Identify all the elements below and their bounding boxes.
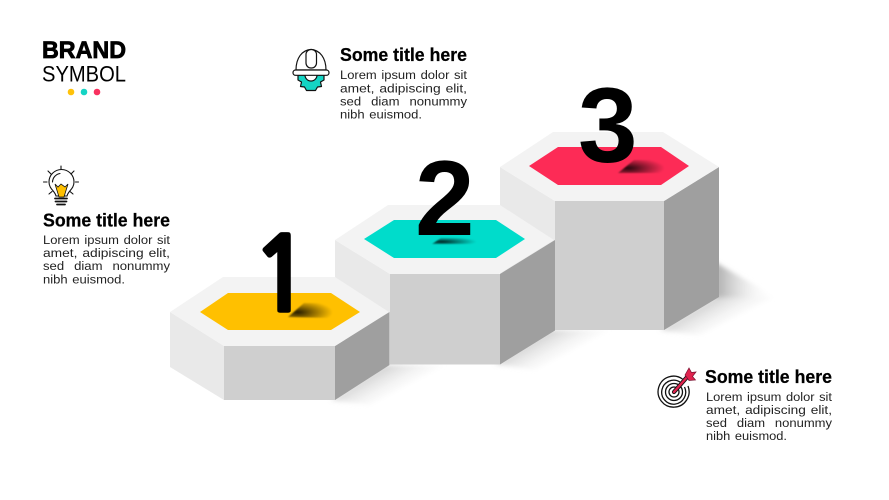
number 1: 1 [250,225,313,327]
body text: amet, adipiscing elit, [340,82,467,96]
body text: nibh euismod. [706,429,787,443]
number 3: 3 [578,65,638,185]
body text: Lorem ipsum dolor sit [340,68,468,82]
brand logo: SYMBOL [42,62,126,86]
block: lightbulb idea [43,166,171,286]
hexagon step 3 [500,132,719,330]
body text: amet, adipiscing elit, [43,246,170,260]
title: Some title here [705,367,832,387]
body text: Lorem ipsum dolor sit [43,233,171,247]
number 2: 2 [415,138,475,258]
block: helmet and gear [293,45,468,122]
body text: nibh euismod. [340,108,422,122]
icon: lightbulb [44,166,78,204]
body text: sed diam nonummy [706,416,833,430]
brand logo: BRAND [42,37,126,64]
brand logo [42,37,126,95]
hexagon step 2 [335,205,555,364]
ground shadows [331,262,775,405]
title: Some title here [340,45,467,65]
body text: sed diam nonummy [340,94,468,108]
body text [340,68,468,122]
body text: Lorem ipsum dolor sit [706,390,833,404]
body text [43,233,171,286]
icon: helmet with gear [293,50,329,90]
body text: sed diam nonummy [43,259,171,273]
block: target [658,367,833,443]
title: Some title here [43,210,170,230]
hexagon step 1 [170,277,390,400]
body text: nibh euismod. [43,272,125,286]
icon: target with arrow [658,368,696,407]
body text: amet, adipiscing elit, [706,403,832,417]
body text [706,390,833,443]
